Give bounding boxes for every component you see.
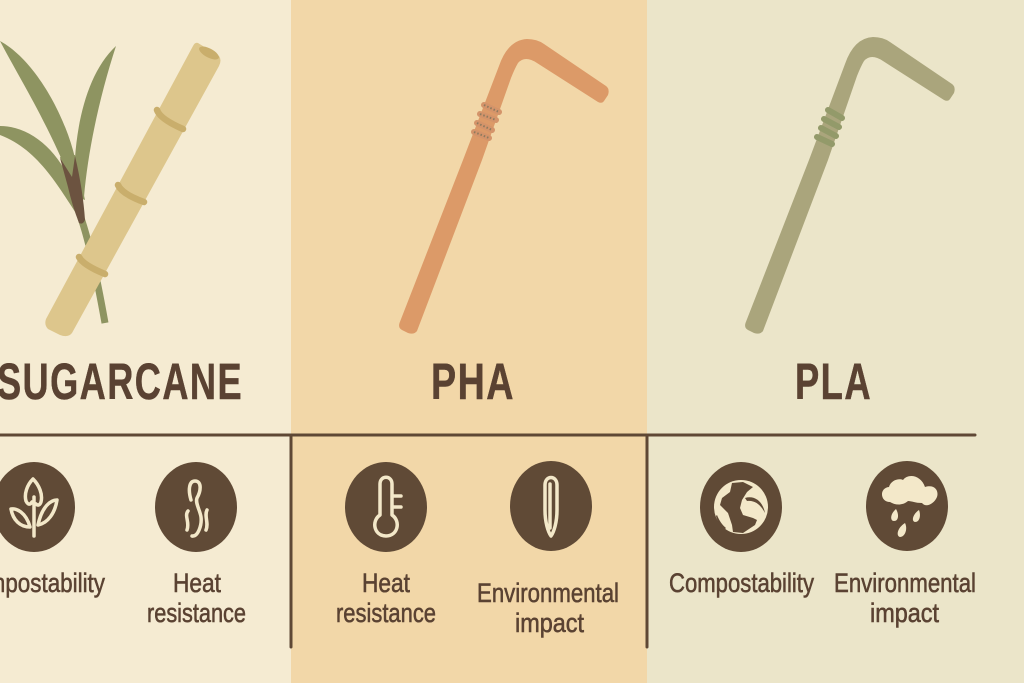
icon: globe xyxy=(700,462,782,552)
label: environmental impact: Environmental xyxy=(477,578,619,608)
illustration: green PLA straw xyxy=(745,37,955,334)
label: heat resistance xyxy=(147,568,246,628)
PHA panel background xyxy=(291,0,647,683)
panel: sugarcane xyxy=(0,0,291,683)
heading: sugarcane: SUGARCANE xyxy=(0,353,243,410)
icon: rain cloud xyxy=(866,461,948,551)
label: heat resistance: Heat xyxy=(362,568,410,598)
label: environmental impact: impact xyxy=(870,598,939,628)
icon: heat waves xyxy=(155,462,237,552)
icon: thermometer xyxy=(345,462,427,552)
label: heat resistance: resistance xyxy=(147,598,246,628)
label: environmental impact: impact xyxy=(515,608,584,638)
label: compostability: Compostability xyxy=(669,568,814,598)
panel: PHA xyxy=(291,0,647,683)
label: heat resistance: Heat xyxy=(173,568,221,598)
icon: straw xyxy=(510,461,592,551)
PLA panel background xyxy=(647,0,1024,683)
illustration: sugarcane stalk with leaves xyxy=(0,41,221,336)
heading: PLA: PLA xyxy=(795,353,872,410)
illustration: orange PHA straw xyxy=(399,39,609,334)
label: environmental impact xyxy=(477,578,619,638)
panel: PLA xyxy=(647,0,1024,683)
label: heat resistance xyxy=(336,568,436,628)
label: environmental impact: Environmental xyxy=(834,568,976,598)
label: environmental impact xyxy=(834,568,976,628)
icon: plant sprout xyxy=(0,462,75,552)
sugarcane panel background xyxy=(0,0,291,683)
heading: PHA: PHA xyxy=(431,353,515,410)
label: heat resistance: resistance xyxy=(336,598,436,628)
